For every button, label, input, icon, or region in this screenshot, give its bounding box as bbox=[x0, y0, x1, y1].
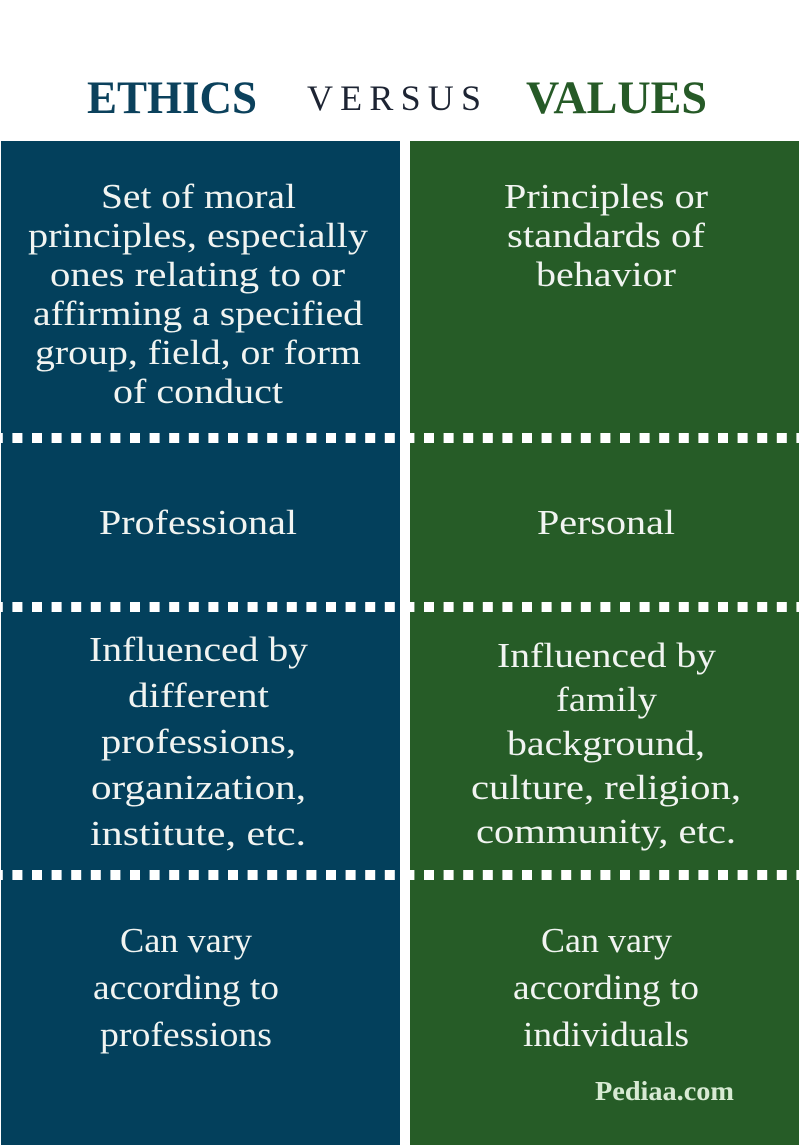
values definition: Principles or bbox=[504, 177, 708, 216]
ethics definition: principles, especially bbox=[28, 216, 369, 255]
ethics variation bbox=[93, 921, 279, 1054]
ethics influences: institute, etc. bbox=[90, 814, 306, 853]
values nature: Personal bbox=[537, 503, 675, 542]
ethics influences bbox=[89, 630, 309, 853]
heading: ethics: ETHICS bbox=[87, 72, 257, 124]
values influences: Influenced by bbox=[497, 636, 717, 675]
ethics nature: Professional bbox=[99, 503, 297, 542]
ethics influences: professions, bbox=[101, 722, 296, 761]
ethics variation: Can vary bbox=[120, 921, 253, 960]
panel: values column bbox=[410, 141, 799, 1145]
values definition: behavior bbox=[536, 255, 676, 294]
panel: ethics column bbox=[1, 141, 400, 1145]
values variation bbox=[513, 921, 699, 1054]
values variation: individuals bbox=[523, 1015, 689, 1054]
values influences: background, bbox=[507, 724, 705, 763]
values influences: culture, religion, bbox=[471, 768, 741, 807]
ethics influences: organization, bbox=[91, 768, 306, 807]
ethics definition: ones relating to or bbox=[50, 255, 345, 294]
ethics influences: different bbox=[128, 676, 269, 715]
ethics variation: according to bbox=[93, 968, 279, 1007]
ethics definition: affirming a specified bbox=[33, 294, 364, 333]
ethics definition bbox=[28, 177, 369, 411]
title bbox=[87, 72, 707, 124]
values influences: community, etc. bbox=[476, 812, 736, 851]
values definition bbox=[504, 177, 708, 294]
row dividers bbox=[0, 438, 799, 875]
ethics definition: Set of moral bbox=[101, 177, 296, 216]
ethics definition: group, field, or form bbox=[35, 333, 361, 372]
values definition: standards of bbox=[507, 216, 705, 255]
values variation: according to bbox=[513, 968, 699, 1007]
ethics definition: of conduct bbox=[113, 372, 283, 411]
ethics variation: professions bbox=[100, 1015, 272, 1054]
heading: values: VALUES bbox=[526, 72, 707, 124]
logo: Pediaa.com: Pediaa.com bbox=[595, 1076, 735, 1106]
values variation: Can vary bbox=[541, 921, 673, 960]
ethics influences: Influenced by bbox=[89, 630, 309, 669]
values influences bbox=[471, 636, 741, 851]
heading: versus: VERSUS bbox=[307, 78, 481, 118]
values influences: family bbox=[556, 680, 658, 719]
